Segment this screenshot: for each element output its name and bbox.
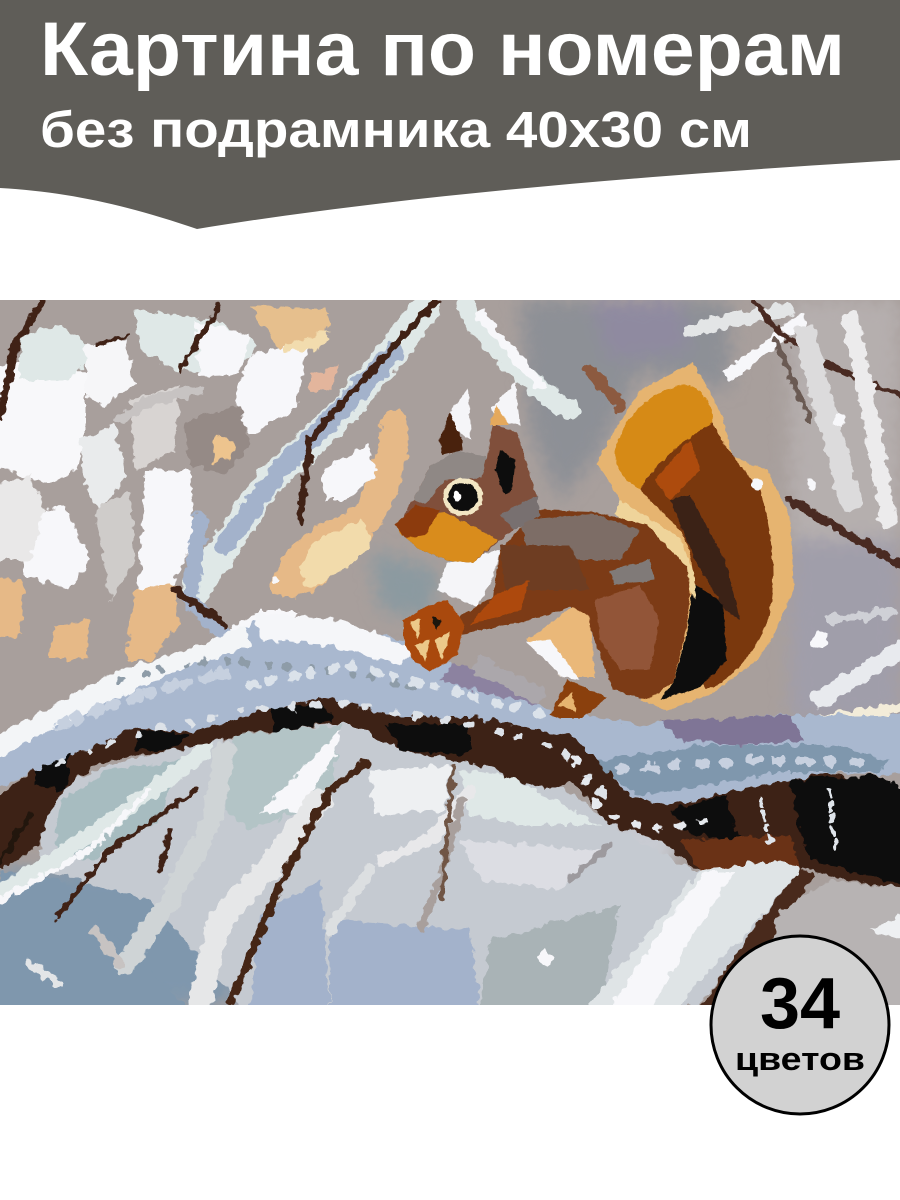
speckles [272, 414, 846, 965]
painting: snowy branches with squirrel [0, 270, 900, 1035]
main snowy branch [0, 615, 900, 807]
badge label: цветов [735, 1041, 865, 1077]
squirrel belly and chest [437, 550, 500, 607]
subtitle: без подрамника 40х30 см [40, 101, 752, 158]
lower snow field [40, 723, 800, 1005]
squirrel head [397, 423, 537, 563]
squirrel tail light fringe [615, 500, 695, 600]
speckled snow [60, 660, 860, 850]
squirrel paws [403, 600, 465, 672]
upper-left white snow and warm patches [0, 305, 408, 660]
squirrel eye [443, 478, 484, 516]
badge: 34 colours [711, 936, 889, 1114]
dark bark [0, 697, 900, 893]
background tones [0, 300, 900, 1005]
upper branches [0, 302, 900, 728]
badge number: 34 [760, 964, 840, 1044]
header banner [0, 0, 900, 229]
lower right snowy branch [585, 860, 800, 1010]
squirrel tail [597, 362, 794, 710]
squirrel ears [440, 413, 463, 455]
squirrel body [445, 510, 690, 700]
squirrel [395, 362, 794, 718]
lower twigs with snow [0, 750, 610, 1003]
squirrel black shadow [660, 583, 727, 700]
title: Картина по номерам [40, 7, 845, 92]
